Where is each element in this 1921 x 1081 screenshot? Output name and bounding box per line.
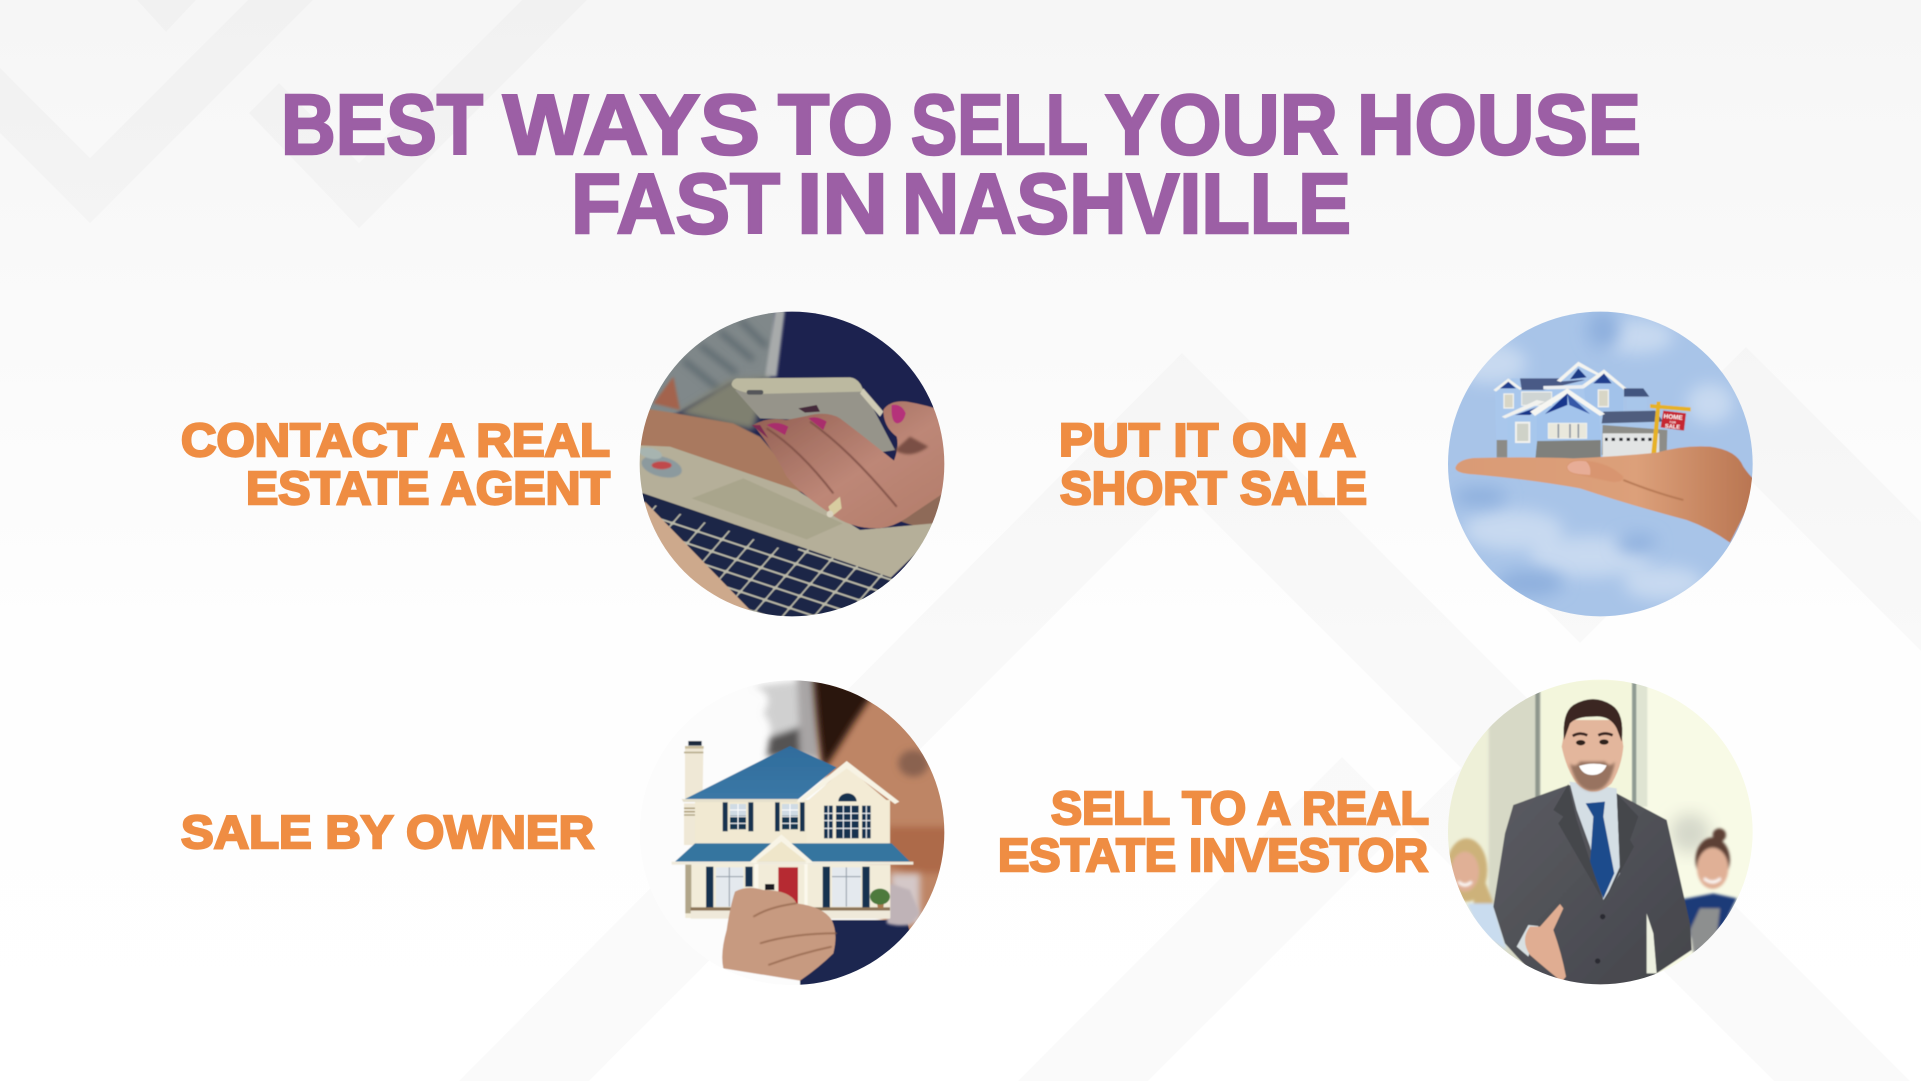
for sale sign: SALE xyxy=(1665,424,1680,431)
photo: phone and laptop xyxy=(640,312,944,616)
title line 2: FAST xyxy=(571,157,780,252)
title line 2: NASHVILLE xyxy=(902,157,1351,252)
title line 1: YOUR xyxy=(1105,78,1338,173)
title line 1: BEST xyxy=(281,78,483,173)
label: put it on a short sale: PUT IT ON A xyxy=(1059,414,1356,466)
smoke and hair xyxy=(756,680,821,760)
title line 2: IN xyxy=(797,157,888,252)
title line 2 xyxy=(571,157,1351,252)
for sale sign xyxy=(1650,402,1691,460)
tie xyxy=(1586,802,1614,898)
label: sell to a real estate investor: ESTATE INVESTOR xyxy=(998,829,1428,881)
shirt xyxy=(1569,782,1620,900)
photo: person holding model house xyxy=(671,680,944,985)
lapels xyxy=(1554,784,1600,893)
title line 1: HOUSE xyxy=(1357,78,1641,173)
label: put it on a short sale: SHORT SALE xyxy=(1060,462,1367,514)
hand xyxy=(1525,904,1566,982)
label: contact a real estate agent: ESTATE AGENT xyxy=(246,462,610,514)
model house xyxy=(672,741,913,919)
photo: smiling businessman offering handshake xyxy=(1448,680,1752,984)
woman left xyxy=(1446,838,1507,950)
woman right xyxy=(1682,828,1737,953)
label: sale by owner: SALE BY OWNER xyxy=(181,806,594,858)
photo: house in hand against sky xyxy=(1448,312,1753,616)
label: sell to a real estate investor: SELL TO A REAL xyxy=(1051,782,1429,834)
title line 1: SELL xyxy=(911,78,1088,173)
for sale sign: HOME xyxy=(1663,413,1683,422)
title xyxy=(281,78,1641,252)
title line 1: TO xyxy=(778,78,893,173)
hand xyxy=(1455,446,1757,543)
title line 1 xyxy=(281,78,1641,173)
hand xyxy=(722,888,835,981)
label: contact a real estate agent xyxy=(181,414,610,514)
jacket xyxy=(1493,785,1692,987)
label: sell to a real estate investor xyxy=(998,782,1429,881)
label: put it on a short sale xyxy=(1059,414,1367,514)
house body xyxy=(1493,362,1667,460)
label: contact a real estate agent: CONTACT A REAL xyxy=(181,414,610,466)
head xyxy=(1562,699,1623,792)
arm cuff xyxy=(1517,925,1538,957)
for sale sign: FOR xyxy=(1669,420,1677,425)
title line 1: WAYS xyxy=(503,78,760,173)
